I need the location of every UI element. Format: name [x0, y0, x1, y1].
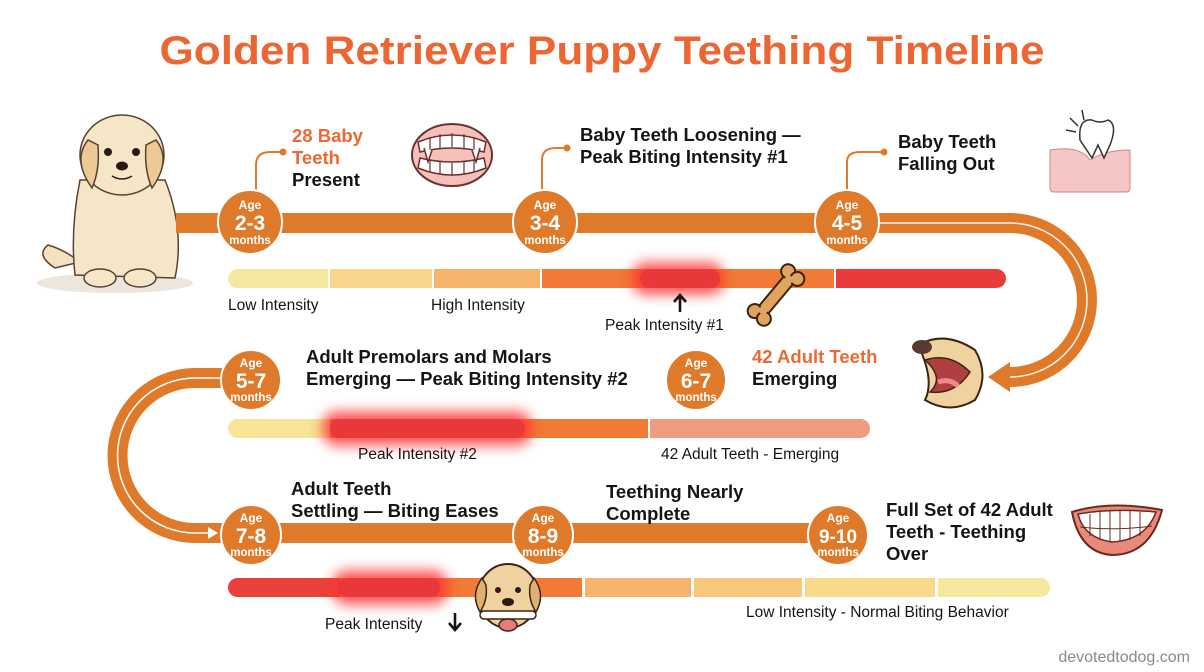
text: 28 Baby Teeth Present: Teeth [292, 147, 340, 168]
milestone: 3-4 months: months [524, 235, 566, 247]
labels: row 2 bar: Peak Intensity #2 [358, 446, 477, 463]
footer: source: devotedtodog.com [1058, 649, 1190, 666]
text: Adult Premolars and Molars: Emerging — Peak Biting Intensity #2 [306, 368, 628, 389]
milestone: 6-7 months [666, 350, 726, 410]
milestone: 7-8 months [221, 505, 281, 565]
milestone: 4-5 months [815, 148, 888, 254]
milestone: 3-4 months [513, 144, 577, 254]
milestone: 5-7 months: months [230, 392, 272, 404]
milestone: 2-3 months: 2-3 [235, 212, 265, 235]
milestone: 4-5 months: Age [836, 198, 859, 212]
milestone: 6-7 months: months [675, 392, 717, 404]
milestone: 2-3 months [218, 148, 286, 254]
labels: row 1 bar: Low Intensity [228, 297, 319, 314]
milestone: 7-8 months: months [230, 547, 272, 559]
icon: smiling mouth [1072, 505, 1162, 555]
milestone: 2-3 months: Age [239, 198, 262, 212]
text: Teething Nearly Complete [606, 481, 744, 524]
labels: row 1 bar: Peak Intensity #1 [605, 317, 724, 334]
text: Baby Teeth Loosening [580, 124, 801, 167]
text: Full Set of 42 Adult Teeth [886, 499, 1053, 564]
icon: loose tooth in gum [1050, 110, 1130, 192]
icon: sitting puppy [37, 115, 193, 293]
track: row 2 with left curve to row 3 [118, 378, 840, 539]
milestone: 5-7 months: 5-7 [236, 370, 266, 393]
text: Adult Teeth Settling [291, 478, 499, 521]
milestone: 9-10 months: 9-10 [819, 527, 857, 548]
text: Teething Nearly Complete: Complete [606, 503, 690, 524]
labels: row 3 bar [325, 604, 1009, 633]
milestone: 3-4 months: Age [534, 198, 557, 212]
milestone: 9-10 months: Age [827, 511, 850, 525]
milestone: 7-8 months: 7-8 [236, 525, 266, 548]
text: Full Set of 42 Adult Teeth: Full Set of 42 Adult [886, 499, 1053, 520]
text: Adult Premolars and Molars [306, 346, 628, 389]
milestone: 8-9 months [513, 505, 573, 565]
milestone: 2-3 months: months [229, 235, 271, 247]
intensity bar: row 3 [228, 570, 1050, 605]
milestone: 6-7 months: Age [685, 356, 708, 370]
milestone: 5-7 months: Age [240, 356, 263, 370]
milestone: 5-7 months [221, 350, 281, 410]
icon: dog open mouth [912, 339, 982, 408]
text: Adult Premolars and Molars: Adult Premolars and Molars [306, 346, 552, 367]
milestone: 7-8 months: Age [240, 511, 263, 525]
text: Full Set of 42 Adult Teeth: Teeth - Teething [886, 521, 1026, 542]
milestone: 4-5 months: months [826, 235, 868, 247]
icon: bone [745, 261, 807, 329]
text: 42 Adult Teeth Emerging [752, 346, 877, 389]
text: 28 Baby Teeth Present: Present [292, 169, 360, 190]
labels: row 3 bar: Peak Intensity [325, 616, 423, 633]
text: Baby Teeth Falling Out [898, 131, 996, 174]
labels: row 1 bar: High Intensity [431, 297, 525, 314]
milestone: 8-9 months: 8-9 [528, 525, 558, 548]
text: 28 Baby Teeth Present: 28 Baby [292, 125, 364, 146]
icon: baby teeth [412, 124, 492, 186]
text: Baby Teeth Falling Out: Falling Out [898, 153, 995, 174]
milestone: 9-10 months: months [817, 547, 859, 559]
milestone: 8-9 months: months [522, 547, 564, 559]
labels: row 2 bar: 42 Adult Teeth - Emerging [661, 446, 839, 463]
text: Full Set of 42 Adult Teeth: Over [886, 543, 928, 564]
milestone: 8-9 months: Age [532, 511, 555, 525]
labels: row 2 bar [358, 446, 839, 463]
track: row 1 with right return curve [176, 223, 1087, 392]
text: Baby Teeth Falling Out: Baby Teeth [898, 131, 996, 152]
text: 28 Baby Teeth Present [292, 125, 364, 190]
icon: puppy head with bone [475, 564, 541, 631]
intensity bar: row 1 [228, 262, 1006, 295]
text: Adult Teeth Settling: Adult Teeth [291, 478, 391, 499]
text: Baby Teeth Loosening: Baby Teeth Loosening — [580, 124, 801, 145]
milestone: 4-5 months: 4-5 [832, 212, 862, 235]
labels: row 3 bar: Low Intensity - Normal Biting Behavior [746, 604, 1009, 621]
text: 42 Adult Teeth Emerging: Emerging [752, 368, 837, 389]
text: 42 Adult Teeth Emerging: 42 Adult Teeth [752, 346, 877, 367]
text: Teething Nearly Complete: Teething Nearly [606, 481, 744, 502]
milestone: 9-10 months [808, 505, 868, 565]
milestone: 3-4 months: 3-4 [530, 212, 560, 235]
labels: row 1 bar [228, 295, 724, 334]
intensity bar: row 2 [228, 411, 870, 446]
milestone: 6-7 months: 6-7 [681, 370, 711, 393]
title: Golden Retriever Puppy Teething Timeline [160, 29, 1044, 73]
text: Adult Teeth Settling: Settling — Biting Eases [291, 500, 499, 521]
text: Baby Teeth Loosening: Peak Biting Intensity #1 [580, 146, 788, 167]
